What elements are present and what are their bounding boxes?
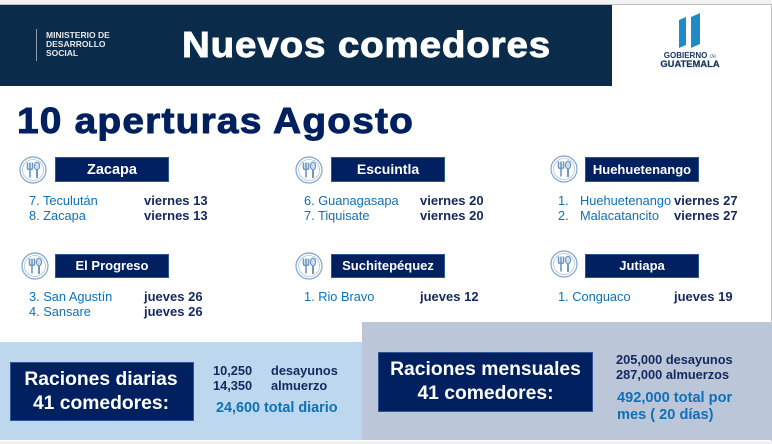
daily rations heading	[10, 362, 194, 421]
El Progreso dates: jueves 26	[144, 289, 203, 304]
ministry name	[46, 30, 110, 58]
Huehuetenango municipalities: 1.	[558, 193, 569, 208]
logo text: Gobierno de: GOBIERNO de	[664, 51, 716, 60]
Zacapa municipalities: 7. Teculután	[29, 193, 98, 208]
daily rations heading: Raciones diarias	[24, 369, 178, 390]
heading: Zacapa	[55, 157, 169, 182]
subtitle: 10 aperturas Agosto	[17, 100, 414, 141]
icon: plate and cutlery, Huehuetenango	[550, 155, 578, 183]
El Progreso municipalities: 3. San Agustín	[29, 289, 112, 304]
monthly total: mes ( 20 días)	[617, 407, 714, 423]
heading: Suchitepéquez	[331, 254, 445, 278]
heading: Jutiapa: Jutiapa	[619, 258, 665, 273]
Escuintla municipalities: 6. Guanagasapa	[304, 193, 399, 208]
daily total: 24,600 total diario	[216, 400, 338, 416]
monthly figures: 205,000 desayunos	[616, 352, 733, 367]
monthly figures	[616, 352, 733, 382]
monthly rations heading: 41 comedores:	[417, 383, 554, 404]
title: Nuevos comedores	[182, 24, 551, 65]
Escuintla dates: viernes 20	[420, 193, 484, 208]
Escuintla dates: viernes 20	[420, 208, 484, 223]
heading: El Progreso: El Progreso	[76, 258, 148, 273]
Huehuetenango dates	[674, 193, 738, 223]
daily figures: almuerzo	[271, 378, 327, 393]
monthly total: 492,000 total por	[617, 390, 732, 406]
heading: Suchitepéquez: Suchitepéquez	[342, 258, 434, 273]
icon: plate and cutlery, Jutiapa	[550, 250, 578, 278]
Zacapa municipalities	[29, 193, 98, 223]
Huehuetenango municipalities: 2.	[558, 208, 569, 223]
Huehuetenango dates: viernes 27	[674, 208, 738, 223]
panel: monthly rations	[362, 322, 772, 440]
heading: Escuintla	[331, 157, 445, 182]
heading: Huehuetenango	[585, 157, 699, 182]
El Progreso municipalities: 4. Sansare	[29, 304, 91, 319]
heading: Zacapa: Zacapa	[87, 162, 137, 178]
daily figures: 10,250	[213, 363, 252, 378]
heading: El Progreso	[55, 254, 169, 278]
El Progreso dates: jueves 26	[144, 304, 203, 319]
panel: daily rations	[0, 342, 362, 440]
Huehuetenango municipalities: Huehuetenango	[580, 193, 671, 208]
icon: plate and cutlery, Suchitepéquez	[295, 252, 323, 280]
ministry name: MINISTERIO DE	[46, 30, 110, 40]
daily figures	[213, 363, 338, 393]
El Progreso dates	[144, 289, 203, 319]
Escuintla municipalities: 7. Tiquisate	[304, 208, 369, 223]
Zacapa municipalities: 8. Zacapa	[29, 208, 86, 223]
ministry name: SOCIAL	[46, 48, 78, 58]
icon: plate and cutlery, El Progreso	[21, 252, 49, 280]
Jutiapa date: jueves 19	[674, 289, 733, 304]
Zacapa dates: viernes 13	[144, 208, 208, 223]
Suchitepéquez date: jueves 12	[420, 289, 479, 304]
Escuintla municipalities	[304, 193, 399, 223]
heading: Escuintla: Escuintla	[357, 161, 419, 177]
Suchitepéquez municipality: 1. Rio Bravo	[304, 289, 374, 304]
Huehuetenango municipalities	[558, 193, 671, 223]
monthly rations heading	[378, 352, 593, 412]
daily figures: desayunos	[271, 363, 338, 378]
Huehuetenango municipalities: Malacatancito	[580, 208, 659, 223]
icon: plate and cutlery, Zacapa	[19, 156, 47, 184]
monthly figures: 287,000 almuerzos	[616, 367, 729, 382]
monthly total	[617, 390, 732, 423]
Escuintla dates	[420, 193, 484, 223]
logo text: Guatemala: GUATEMALA	[660, 58, 720, 69]
monthly rations heading: Raciones mensuales	[390, 359, 581, 380]
El Progreso municipalities	[29, 289, 112, 319]
Jutiapa municipality: 1. Conguaco	[558, 289, 631, 304]
Zacapa dates: viernes 13	[144, 193, 208, 208]
Huehuetenango dates: viernes 27	[674, 193, 738, 208]
heading: Huehuetenango: Huehuetenango	[593, 162, 691, 177]
government of Guatemala logo	[660, 13, 720, 69]
daily figures: 14,350	[213, 378, 252, 393]
ministry logo	[36, 29, 113, 61]
heading: Jutiapa	[585, 254, 699, 278]
logo mark	[679, 13, 700, 48]
Zacapa dates	[144, 193, 208, 223]
ministry name: DESARROLLO	[46, 39, 106, 49]
header banner	[0, 5, 612, 86]
icon: plate and cutlery, Escuintla	[295, 156, 323, 184]
daily rations heading: 41 comedores:	[33, 393, 169, 414]
